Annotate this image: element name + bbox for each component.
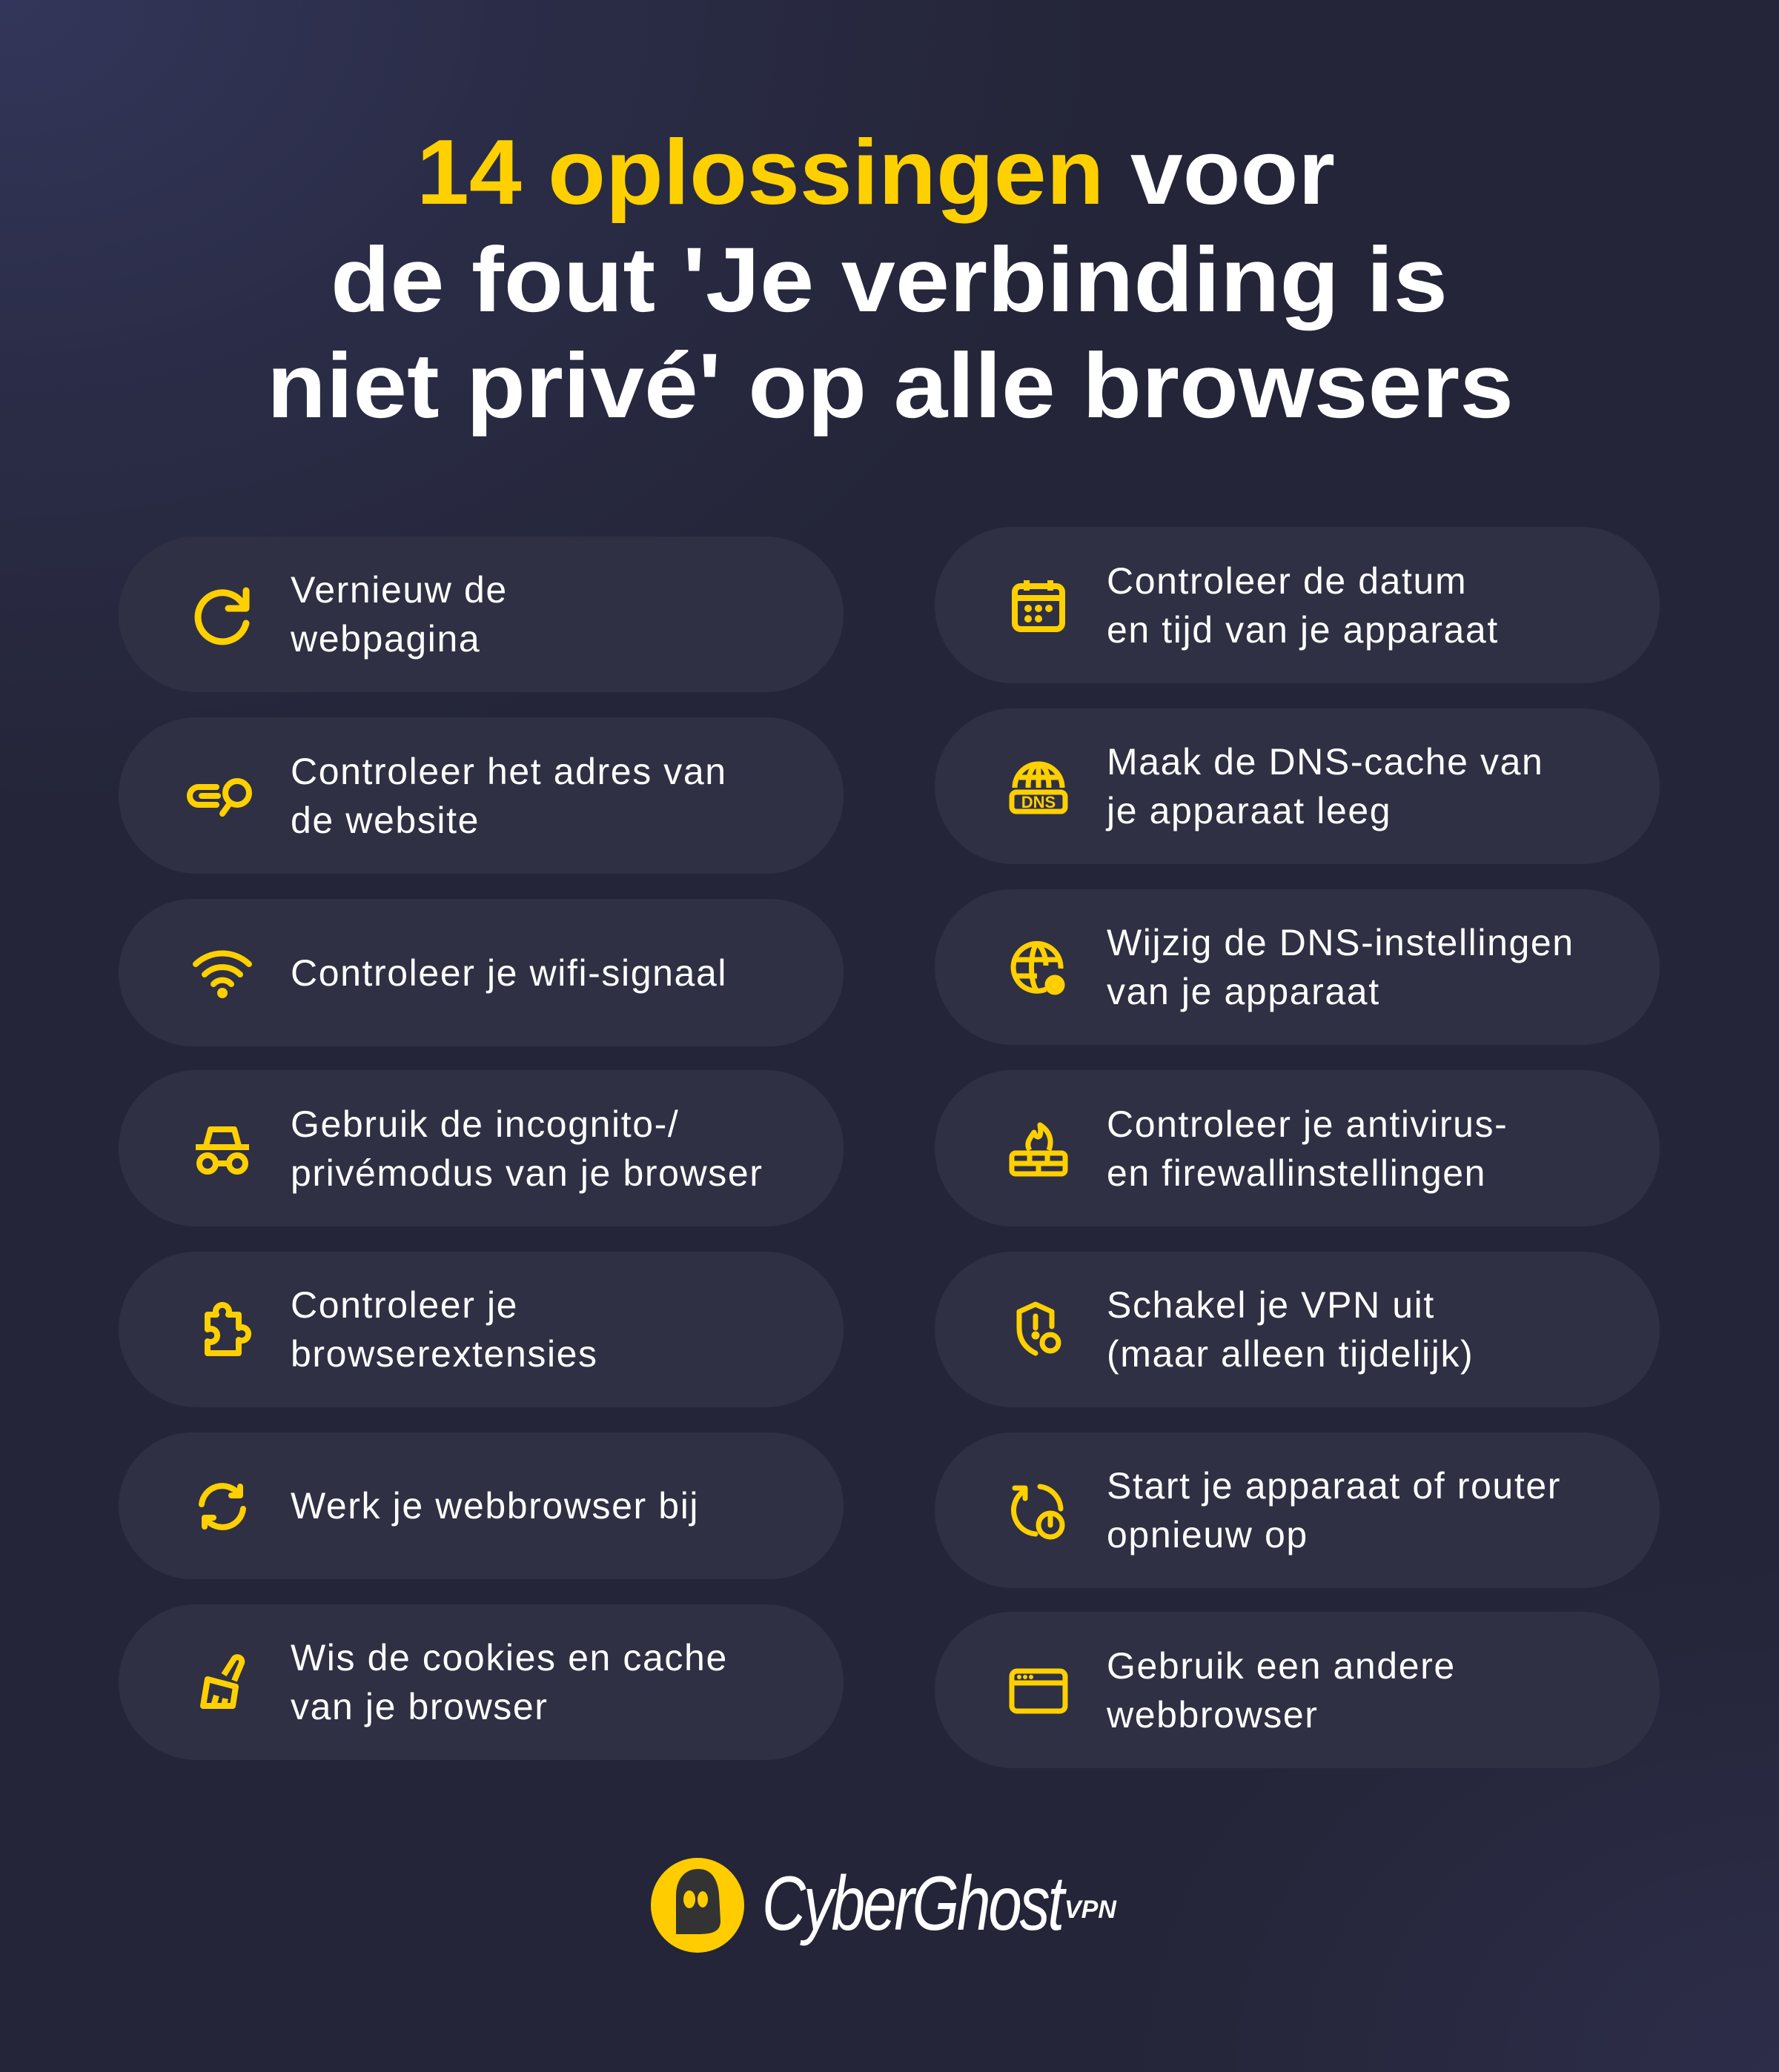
panel: antivirus firewall: en firewallinstellingen xyxy=(1107,1152,1486,1193)
icon: puzzle xyxy=(205,1301,252,1356)
title: 14 oplossingen voor xyxy=(417,122,1335,224)
icon: dns xyxy=(1010,762,1067,814)
panel: other browser xyxy=(935,1612,1660,1768)
icon: incognito xyxy=(196,1126,249,1175)
panel: address: Controleer het adres van xyxy=(291,750,727,791)
icon: ghost xyxy=(651,1858,744,1953)
icon: link search xyxy=(187,778,252,817)
panel: refresh: Vernieuw de xyxy=(291,569,508,611)
panel: extensions xyxy=(119,1252,844,1407)
panel: dns settings xyxy=(935,889,1660,1045)
logo: VPN xyxy=(1064,1896,1117,1924)
icon: globe gear xyxy=(1011,941,1064,995)
logo: CyberGhost xyxy=(762,1861,1067,1947)
panel: wifi xyxy=(119,899,844,1046)
icon: firewall xyxy=(1010,1122,1067,1177)
panel: incognito: Gebruik de incognito-/ xyxy=(291,1103,679,1144)
panel: refresh xyxy=(119,537,844,692)
icon: calendar xyxy=(1012,580,1065,632)
panel: address xyxy=(119,717,844,874)
panel: incognito xyxy=(119,1070,844,1226)
panel: vpn: (maar alleen tijdelijk) xyxy=(1107,1333,1474,1375)
panel: other browser: Gebruik een andere xyxy=(1107,1645,1456,1687)
panel: restart: opnieuw op xyxy=(1107,1514,1308,1555)
panel: antivirus firewall xyxy=(935,1070,1660,1226)
panel: restart xyxy=(935,1432,1660,1588)
panel: date time xyxy=(935,527,1660,683)
panel: cookies xyxy=(119,1604,844,1760)
title: niet privé' op alle browsers xyxy=(267,335,1514,437)
panel: antivirus firewall: Controleer je antivirus- xyxy=(1107,1103,1508,1144)
panel: restart: Start je apparaat of router xyxy=(1107,1465,1561,1507)
panel: incognito: privémodus van je browser xyxy=(291,1152,763,1193)
icon: refresh xyxy=(194,587,249,645)
panel: update browser xyxy=(119,1432,844,1579)
panel: dns cache: Maak de DNS-cache van xyxy=(1107,741,1543,783)
icon: wifi xyxy=(193,950,252,998)
icon: sync xyxy=(199,1483,246,1530)
panel: cookies: van je browser xyxy=(291,1686,549,1727)
panel: address: de website xyxy=(291,799,480,840)
panel: wifi: Controleer je wifi-signaal xyxy=(291,952,727,993)
panel: cookies: Wis de cookies en cache xyxy=(291,1637,728,1678)
panel: vpn xyxy=(935,1252,1660,1407)
panel: extensions: browserextensies xyxy=(291,1333,598,1375)
icon: broom xyxy=(200,1654,245,1709)
logo xyxy=(651,1858,1117,1953)
panel: extensions: Controleer je xyxy=(291,1284,518,1326)
title: de fout 'Je verbinding is xyxy=(331,229,1448,331)
panel: other browser: webbrowser xyxy=(1107,1694,1319,1736)
icon: dns: DNS xyxy=(1021,793,1056,811)
panel: dns settings: van je apparaat xyxy=(1107,971,1380,1012)
icon: restart power xyxy=(1011,1484,1064,1540)
panel: dns cache: je apparaat leeg xyxy=(1107,790,1391,831)
title xyxy=(267,122,1514,437)
panel: refresh: webpagina xyxy=(291,618,480,660)
panel: dns cache xyxy=(935,708,1660,864)
panel: dns settings: Wijzig de DNS-instellingen xyxy=(1107,922,1574,963)
icon: shield xyxy=(1017,1301,1061,1356)
panel: vpn: Schakel je VPN uit xyxy=(1107,1284,1435,1326)
panel: date time: en tijd van je apparaat xyxy=(1107,609,1499,651)
panel: update browser: Werk je webbrowser bij xyxy=(291,1485,699,1527)
panel: date time: Controleer de datum xyxy=(1107,560,1467,602)
icon: browser window xyxy=(1010,1669,1067,1713)
